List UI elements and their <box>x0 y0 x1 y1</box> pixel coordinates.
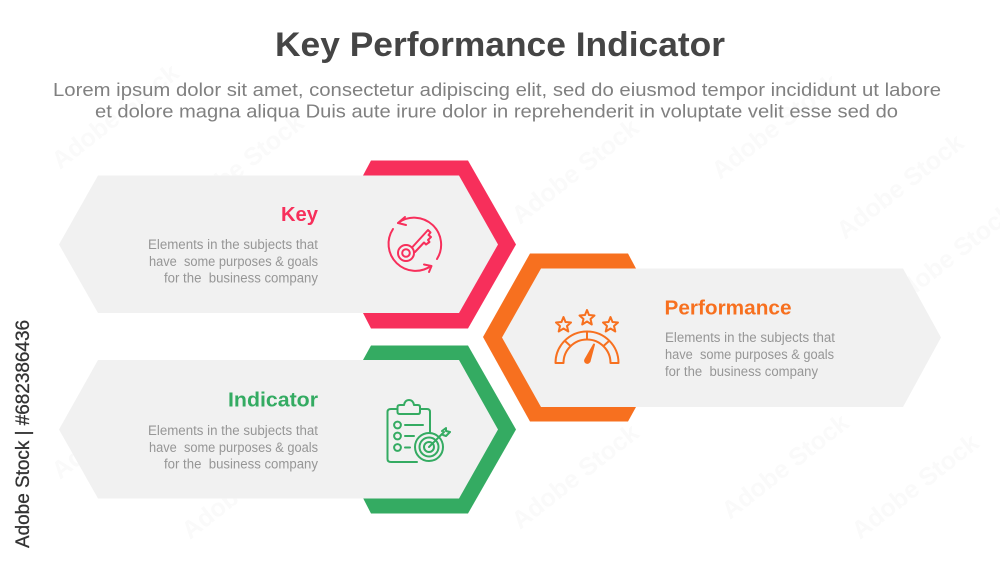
heading: Performance: Performance <box>664 297 792 319</box>
description: for the business company <box>665 364 818 379</box>
description <box>665 330 835 379</box>
title: Key Performance Indicator <box>275 26 725 64</box>
stock watermark pattern: Adobe Stock <box>706 69 844 185</box>
stock watermark pattern: Adobe Stock <box>831 129 969 245</box>
description: Elements in the subjects that <box>665 330 835 345</box>
panel: Indicator <box>59 346 516 514</box>
stock watermark pattern: Adobe Stock <box>506 114 644 230</box>
stock watermark pattern: Adobe Stock <box>716 409 854 525</box>
stock watermark pattern: Adobe Stock <box>506 419 644 535</box>
stock id side label: Adobe Stock | #682386436 <box>13 320 34 548</box>
green hexagon frame <box>363 346 516 514</box>
stock watermark pattern: Adobe Stock <box>46 369 184 485</box>
icon: gauge with three stars <box>556 310 618 363</box>
description: Elements in the subjects that <box>148 237 318 252</box>
heading: Indicator: Indicator <box>228 390 318 412</box>
description <box>148 237 318 286</box>
orange hexagon frame <box>483 254 636 422</box>
grey arrow card <box>59 176 498 313</box>
description: for the business company <box>164 456 318 472</box>
description: for the business company <box>164 270 318 286</box>
description: have some purposes & goals <box>149 254 318 269</box>
stock watermark pattern: Adobe Stock <box>676 289 814 405</box>
red hexagon frame <box>363 160 516 328</box>
heading: Key: Key <box>281 204 319 226</box>
description: have some purposes & goals <box>665 347 834 362</box>
description: Elements in the subjects that <box>148 423 318 438</box>
panel: Performance <box>483 254 941 422</box>
panel: Key <box>59 160 516 328</box>
stock watermark pattern: Adobe Stock <box>846 429 984 545</box>
icon: clipboard with target <box>388 400 450 462</box>
stock watermark pattern: Adobe Stock <box>171 109 309 225</box>
intro text: Lorem ipsum dolor sit amet, consectetur adipiscing elit, sed do eiusmod tempor incididunt ut labore <box>53 80 941 100</box>
stock watermark pattern: Adobe Stock <box>176 429 314 545</box>
stock watermark pattern: Adobe Stock <box>46 59 184 175</box>
intro text: et dolore magna aliqua Duis aute irure dolor in reprehenderit in voluptate velit esse sed do <box>95 102 898 122</box>
grey arrow card <box>502 268 941 407</box>
description <box>148 423 318 472</box>
grey arrow card <box>59 360 498 498</box>
description: have some purposes & goals <box>149 440 318 455</box>
intro text <box>53 80 941 122</box>
icon: key in cycle arrows <box>389 217 441 272</box>
